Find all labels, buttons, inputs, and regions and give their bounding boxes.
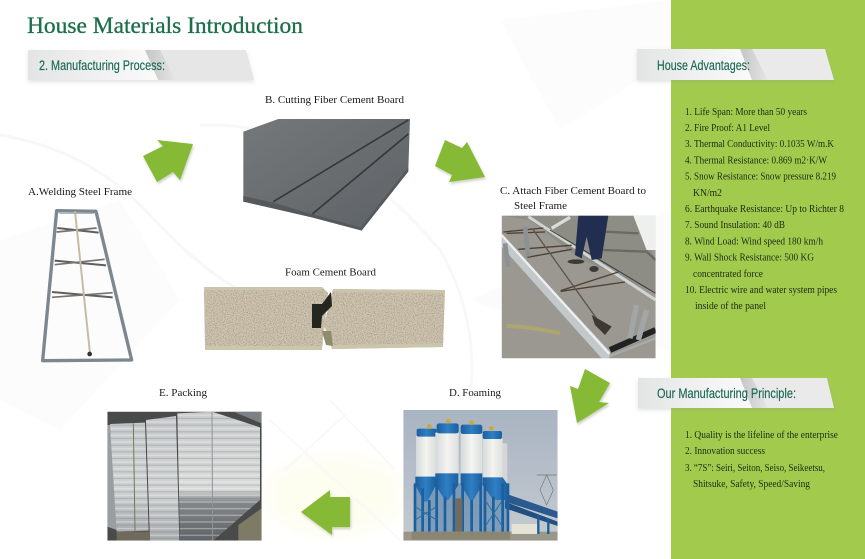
text block: manufacturing principle list (685, 430, 839, 490)
banner: manufacturing principle (638, 378, 834, 408)
text block: house advantages list: 8. Wind Load: Wind speed 180 km/h (685, 236, 823, 248)
label: B: B. Cutting Fiber Cement Board (265, 95, 405, 106)
text block: manufacturing principle list: 1. Quality is the lifeline of the enterprise (685, 430, 839, 441)
banner: house advantages (637, 49, 834, 80)
label: C (500, 186, 646, 212)
text block: house advantages list: 3. Thermal Conductivity: 0.1035 W/m.K (685, 139, 835, 150)
silo 1 (415, 424, 437, 502)
text block: house advantages list: 6. Earthquake Resistance: Up to Richter 8 (685, 204, 844, 215)
image: attaching board to steel frame (502, 216, 656, 358)
banner: manufacturing process (28, 50, 254, 80)
image: fiber cement board (243, 119, 410, 231)
label: A: A.Welding Steel Frame (28, 187, 132, 198)
image: foaming silos (403, 410, 558, 541)
text block: manufacturing principle list: Shitsuke, Safety, Speed/Saving (693, 479, 810, 490)
label: E: E. Packing (159, 388, 208, 399)
banner: manufacturing process: 2. Manufacturing Process: (39, 57, 165, 73)
banner: manufacturing principle: Our Manufacturing Principle: (657, 385, 796, 401)
label: foam cement board: Foam Cement Board (285, 268, 377, 278)
text block: manufacturing principle list: 2. Innovation success (685, 446, 765, 457)
title: House Materials Introduction (27, 13, 304, 38)
panel: green sidebar (671, 0, 865, 559)
arrow: C to D (570, 369, 610, 423)
banner: house advantages: House Advantages: (657, 57, 750, 73)
text block: house advantages list: 7. Sound Insulation: 40 dB (685, 220, 785, 231)
silo 3 (461, 420, 482, 500)
arrow: D to E (301, 490, 350, 535)
text block: house advantages list: 9. Wall Shock Resistance: 500 KG (685, 252, 814, 264)
arrow: A to B (143, 140, 193, 182)
text block: manufacturing principle list: 3. “7S”: Seiri, Seiton, Seiso, Seikeetsu, (685, 463, 825, 474)
faint architectural watermark (0, 0, 671, 540)
silo 4 (483, 426, 508, 500)
text block: house advantages list: 10. Electric wire and water system pipes (685, 285, 837, 296)
text block: house advantages list: inside of the panel (695, 301, 766, 312)
image: foam cement board (204, 287, 445, 350)
image: packed panels (107, 412, 262, 541)
text block: house advantages list: 1. Life Span: More than 50 years (685, 107, 807, 118)
silo 2 (435, 419, 459, 500)
arrow: B to C (435, 140, 485, 182)
image: steel frame (43, 211, 132, 361)
text block: house advantages list: 5. Snow Resistance: Snow pressure 8.219 (685, 172, 836, 182)
label: C: Steel Frame (514, 201, 567, 212)
text block: house advantages list (685, 107, 844, 312)
text block: house advantages list: 4. Thermal Resistance: 0.869 m2·K/W (685, 156, 828, 166)
text block: house advantages list: 2. Fire Proof: A1 Level (685, 123, 770, 134)
text block: house advantages list: concentrated force (693, 269, 764, 280)
text block: house advantages list: KN/m2 (693, 188, 722, 199)
label: C: C. Attach Fiber Cement Board to (500, 186, 646, 197)
label: D: D. Foaming (449, 388, 502, 399)
